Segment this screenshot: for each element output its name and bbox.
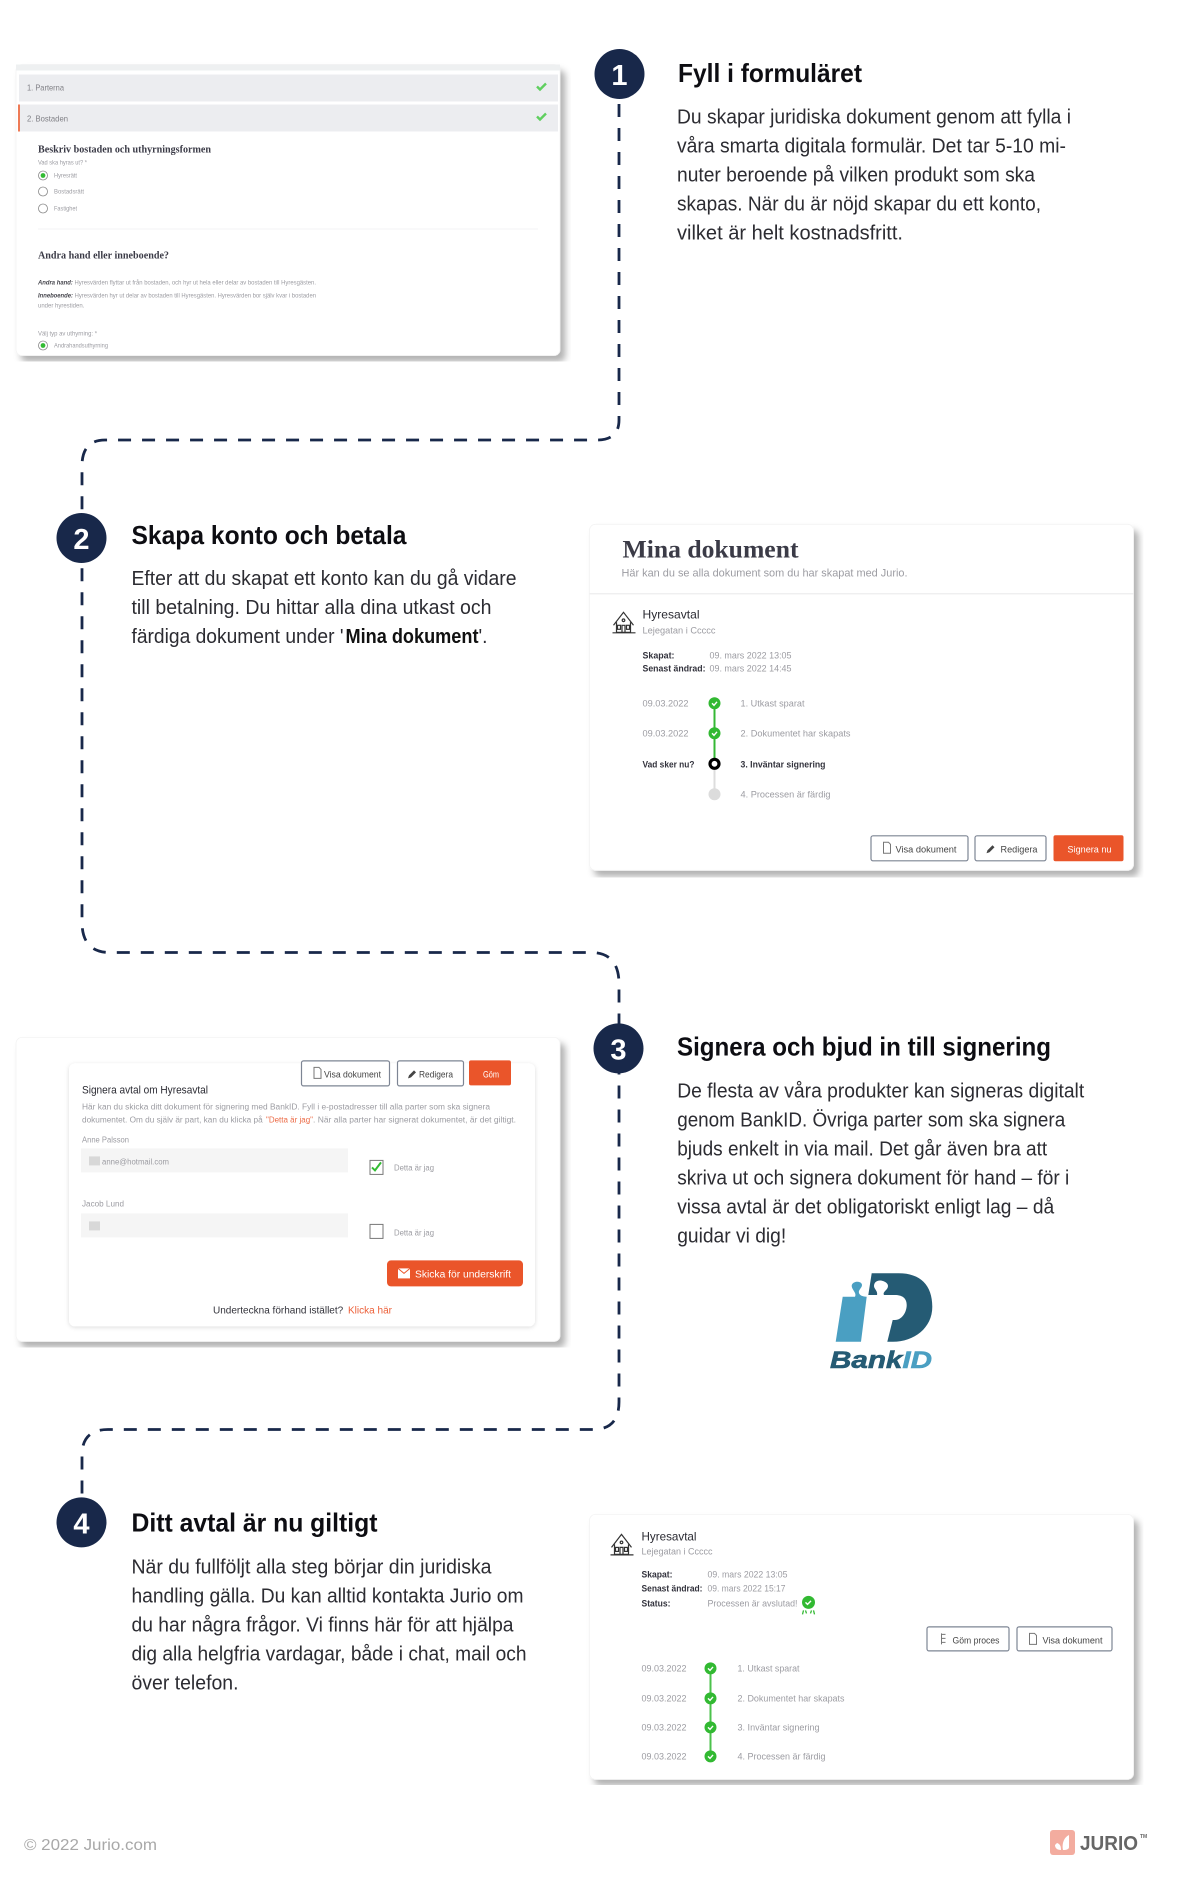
- step 1 text: nuter beroende på vilken produkt som ska: [677, 164, 1036, 186]
- step 4 text: handling gälla. Du kan alltid kontakta Jurio om: [132, 1585, 524, 1607]
- step 1 text: skapas. När du är nöjd skapar du ett konto,: [677, 194, 1041, 216]
- button: Skicka för underskrift: [387, 1260, 523, 1286]
- step 3 text: De flesta av våra produkter kan signeras digitalt: [677, 1080, 1085, 1102]
- step 1 heading: Fyll i formuläret: [678, 58, 862, 88]
- step 2 number badge: 2: [73, 524, 90, 556]
- BankID wordmark: Bank ID: [830, 1347, 932, 1374]
- process timeline: [642, 697, 851, 800]
- process timeline: 1. Utkast sparat: [740, 698, 805, 708]
- button: Visa dokument: [1017, 1627, 1112, 1651]
- form description: "Detta är jag": [266, 1115, 313, 1124]
- step 2 number badge: [56, 513, 106, 563]
- process timeline: 2. Dokumentet har skapats: [740, 728, 851, 738]
- button: Visa dokument: Visa dokument: [896, 844, 957, 854]
- Jurio logo: TM: [1140, 1834, 1147, 1840]
- rental type radio: [38, 332, 108, 350]
- dates and status: Processen är avslutad!: [708, 1598, 798, 1608]
- dates and status: 09. mars 2022 13:05: [708, 1569, 788, 1579]
- icon: green seal: [802, 1596, 815, 1614]
- dates and status: Senast ändrad:: [642, 1583, 702, 1593]
- step 2 text: färdiga dokument under ': [132, 626, 344, 648]
- hand-sign prompt: Underteckna förhand istället?: [213, 1305, 346, 1316]
- step 3 heading: Signera och bjud in till signering: [677, 1032, 1051, 1062]
- step 4 heading: Ditt avtal är nu giltigt: [132, 1507, 378, 1537]
- panel: step 4 completed document screenshot: [590, 1514, 1134, 1779]
- process timeline: 09.03.2022: [642, 1693, 686, 1703]
- radio group: [38, 160, 88, 213]
- button: Visa dokument: Visa dokument: [1042, 1635, 1103, 1645]
- step 2 text: '.: [478, 626, 488, 648]
- process timeline: 4. Processen är färdig: [738, 1751, 826, 1761]
- step 2 text: [132, 568, 516, 648]
- dashed connector path: [82, 104, 619, 1522]
- second form heading: Andra hand eller inneboende?: [38, 250, 169, 262]
- process timeline: 09.03.2022: [642, 1663, 686, 1673]
- row: Parterna: [19, 74, 558, 102]
- step 3 text: [677, 1080, 1085, 1247]
- step 3 text: genom BankID. Övriga parter som ska signera: [677, 1109, 1066, 1131]
- process timeline: 09.03.2022: [642, 728, 688, 738]
- process timeline: 09.03.2022: [642, 698, 688, 708]
- signer: Jacob Lund: [81, 1199, 434, 1238]
- dates and status: [642, 1569, 798, 1608]
- step 4 text: du har några frågor. Vi finns här för att hjälpa: [132, 1614, 514, 1636]
- step 4 text: När du fullföljt alla steg börjar din juridiska: [132, 1556, 492, 1578]
- icon: house: [612, 612, 636, 633]
- button: Redigera: Redigera: [1000, 844, 1038, 854]
- process timeline: [642, 1662, 845, 1762]
- form heading: Beskriv bostaden och uthyrningsformen: [38, 144, 211, 156]
- button: Skicka för underskrift: Skicka för underskrift: [415, 1269, 511, 1280]
- step 1 text: vilket är helt kostnadsfritt.: [677, 222, 903, 244]
- button: Göm proces: Göm proces: [952, 1635, 1000, 1645]
- panel: step 1 form screenshot: [16, 64, 560, 356]
- button: Signera nu: [1054, 835, 1124, 861]
- process timeline: 4. Processen är färdig: [740, 789, 830, 799]
- dates: Senast ändrad:: [642, 663, 706, 673]
- process timeline: 09.03.2022: [642, 1722, 686, 1732]
- form description: dokumentet. Om du själv är part, kan du klicka på: [82, 1115, 265, 1124]
- process timeline: Vad sker nu?: [642, 759, 694, 769]
- step 3 text: guidar vi dig!: [677, 1225, 786, 1247]
- dates: Skapat:: [642, 650, 674, 660]
- signer: Anne Palsson: anne@hotmail.com: [102, 1157, 169, 1166]
- step 3 text: skriva ut och signera dokument för hand – för i: [677, 1167, 1069, 1189]
- step 2 text: Efter att du skapat ett konto kan du gå vidare: [132, 568, 516, 590]
- step 4 text: [132, 1556, 526, 1694]
- step 4 number badge: [56, 1497, 106, 1547]
- step 1 text: våra smarta digitala formulär. Det tar 5-10 mi-: [677, 136, 1066, 158]
- form description: Här kan du skicka ditt dokument för signering med BankID. Fyll i e-postadresser till alla parter som ska signera: [82, 1102, 491, 1111]
- button: Visa dokument: [302, 1061, 390, 1086]
- signer: Anne Palsson: Detta är jag: [394, 1163, 434, 1172]
- row: Bostaden: [18, 104, 558, 132]
- button: Göm: Göm: [483, 1069, 499, 1079]
- signer: Jacob Lund: Detta är jag: [394, 1228, 434, 1237]
- radio group: Vad ska hyras ut? *: [38, 160, 88, 166]
- hand-sign prompt: Klicka här: [348, 1305, 393, 1316]
- step 3 text: bjuds enkelt in via mail. Det går även bra att: [677, 1138, 1048, 1160]
- step 1 number badge: [594, 49, 644, 99]
- page subtitle: Här kan du se alla dokument som du har skapat med Jurio.: [622, 567, 908, 579]
- button: Visa dokument: Visa dokument: [324, 1069, 381, 1079]
- process timeline: 3. Inväntar signering: [740, 759, 826, 769]
- button: Redigera: Redigera: [419, 1069, 453, 1079]
- document title: Hyresavtal: [642, 1529, 696, 1543]
- button: Signera nu: Signera nu: [1068, 844, 1112, 854]
- step 4 text: dig alla helgfria vardagar, både i chat, mail och: [132, 1643, 526, 1665]
- form title: Signera avtal om Hyresavtal: [82, 1084, 208, 1096]
- Jurio logo: [1050, 1830, 1147, 1855]
- footer copyright: © 2022 Jurio.com: [24, 1837, 157, 1854]
- process timeline: 2. Dokumentet har skapats: [738, 1693, 845, 1703]
- Jurio logo: JURIO: [1080, 1833, 1138, 1855]
- radio group: Hyresrätt: [54, 174, 77, 180]
- step 3 number badge: 3: [610, 1034, 627, 1066]
- form description: [82, 1102, 516, 1124]
- dates: 09. mars 2022 13:05: [710, 650, 792, 660]
- step 4 text: över telefon.: [132, 1672, 238, 1694]
- signer: Jacob Lund: Jacob Lund: [82, 1199, 124, 1208]
- process timeline: 09.03.2022: [642, 1751, 686, 1761]
- rental type radio: Välj typ av uthyrning: *: [38, 332, 98, 338]
- radio group: Fastighet: [54, 206, 77, 212]
- dates and status: Status:: [642, 1598, 670, 1608]
- form description: . När alla parter har signerat dokumentet, är det giltigt.: [313, 1115, 516, 1124]
- row: Parterna: 1. Parterna: [27, 82, 64, 92]
- panel: step 2 Mina dokument screenshot: [590, 524, 1134, 870]
- dates and status: 09. mars 2022 15:17: [708, 1583, 786, 1593]
- step 4 number badge: 4: [73, 1508, 90, 1540]
- document subtitle: Lejegatan i Ccccc: [642, 625, 716, 635]
- step 1 text: Du skapar juridiska dokument genom att fylla i: [677, 106, 1071, 128]
- button: Visa dokument: [871, 836, 968, 861]
- process timeline: 3. Inväntar signering: [738, 1722, 820, 1732]
- step 2 text: Mina dokument: [346, 626, 479, 648]
- icon: house: [610, 1534, 634, 1555]
- document title: Hyresavtal: [642, 607, 700, 621]
- step 2 text: till betalning. Du hittar alla dina utkast och: [132, 597, 492, 619]
- page title: Mina dokument: [622, 536, 799, 563]
- row: Bostaden: 2. Bostaden: [27, 114, 68, 124]
- signer: Anne Palsson: Anne Palsson: [82, 1135, 129, 1144]
- step 3 text: vissa avtal är det obligatoriskt enligt lag – då: [677, 1196, 1055, 1218]
- step 2 heading: Skapa konto och betala: [132, 520, 407, 550]
- icon: BankID logo: [830, 1273, 932, 1374]
- button: Redigera: [975, 836, 1046, 861]
- signer: Anne Palsson: [81, 1135, 434, 1174]
- rental type radio: Andrahandsuthyrning: [54, 344, 108, 350]
- button: Göm proces: [927, 1627, 1009, 1651]
- dates and status: Skapat:: [642, 1569, 672, 1579]
- button: Göm: [469, 1060, 511, 1085]
- inner form card: [69, 1063, 535, 1326]
- process timeline: 1. Utkast sparat: [738, 1663, 800, 1673]
- panel: step 3 signing screenshot: [16, 1037, 560, 1341]
- dates: [642, 650, 792, 673]
- explanation text: Inneboende: Hyresvärden hyr ut delar av bostaden till Hyresgästen. Hyresvärden bor själv kvar i bostaden: [38, 294, 316, 300]
- step 3 number badge: [594, 1023, 644, 1073]
- step 1 number badge: 1: [611, 60, 628, 92]
- radio group: Bostadsrätt: [54, 190, 84, 196]
- step 1 text: [677, 106, 1071, 244]
- explanation text: under hyrestiden.: [38, 304, 85, 310]
- explanation text: Andra hand: Hyresvärden flyttar ut från bostaden, och hyr ut hela eller delar av bostaden till Hyresgästen.: [37, 280, 316, 286]
- button: Redigera: [398, 1061, 464, 1086]
- explanation text: [37, 280, 316, 310]
- document subtitle: Lejegatan i Ccccc: [642, 1546, 713, 1556]
- dates: 09. mars 2022 14:45: [710, 663, 792, 673]
